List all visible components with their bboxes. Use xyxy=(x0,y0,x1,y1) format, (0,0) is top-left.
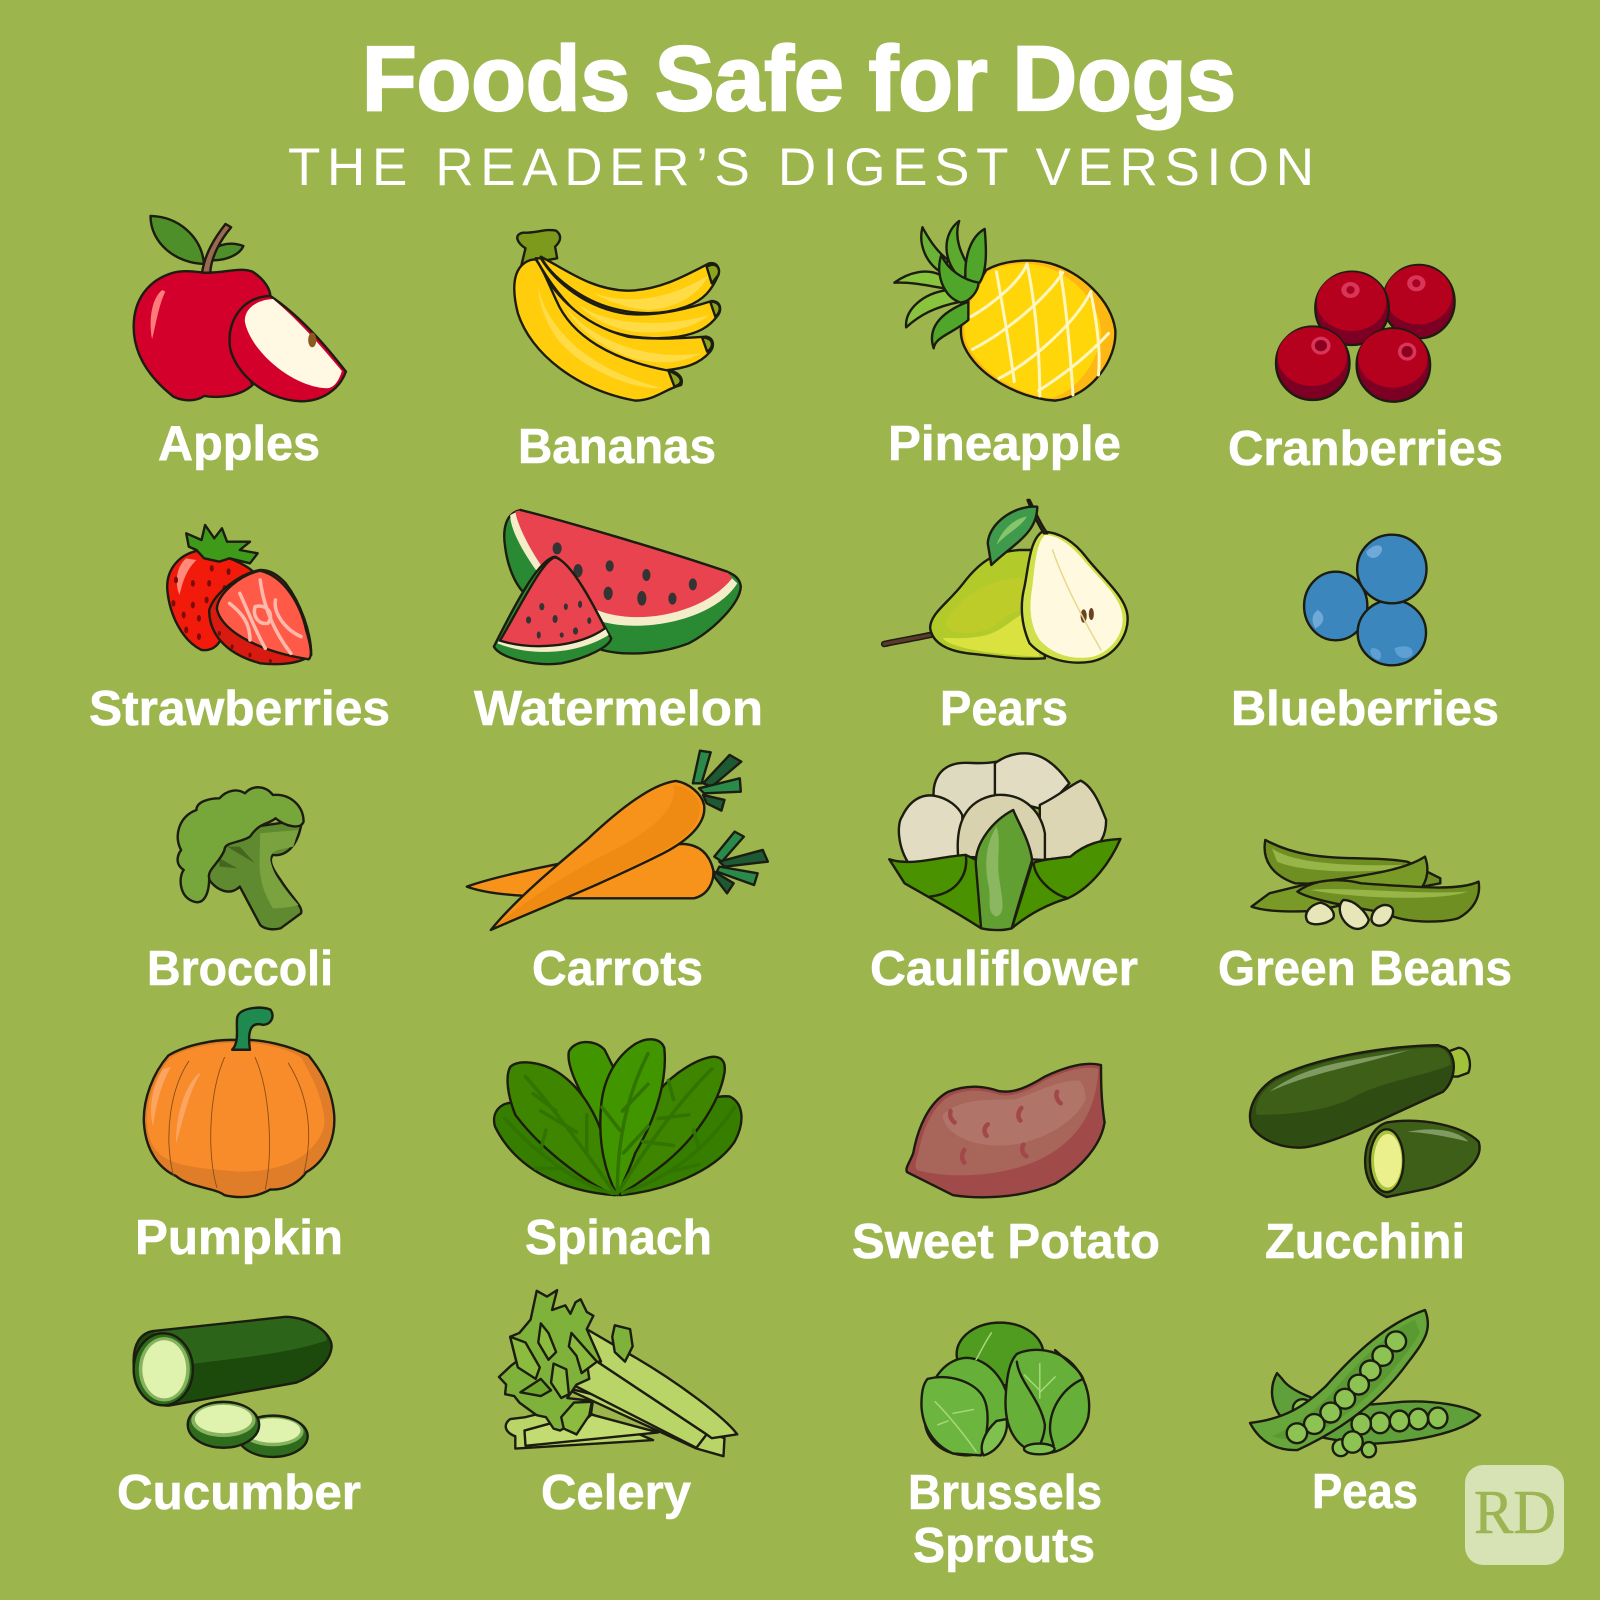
label: Pumpkin: Pumpkin xyxy=(135,1211,343,1265)
icon: pineapple xyxy=(894,221,1115,401)
label: Cucumber: Cucumber xyxy=(117,1466,361,1520)
label: Zucchini: Zucchini xyxy=(1265,1215,1465,1269)
label: Bananas: Bananas xyxy=(518,420,716,474)
label: Celery: Celery xyxy=(541,1466,691,1520)
icon: sweet potato xyxy=(906,1064,1105,1197)
icon: blueberries xyxy=(1304,535,1427,665)
icon: celery xyxy=(499,1290,737,1456)
label: Pears: Pears xyxy=(940,682,1068,736)
label: Peas: Peas xyxy=(1312,1465,1418,1519)
logo: RD badge xyxy=(1465,1465,1564,1565)
subtitle: THE READER’S DIGEST VERSION xyxy=(288,138,1314,197)
label: Carrots: Carrots xyxy=(532,942,703,996)
label: Brussels: Brussels xyxy=(908,1466,1102,1520)
title: Foods Safe for Dogs xyxy=(362,28,1236,130)
label: Strawberries: Strawberries xyxy=(89,682,390,736)
label: Blueberries: Blueberries xyxy=(1231,682,1499,736)
logo: RD badge: RD xyxy=(1474,1479,1556,1547)
icon: bananas xyxy=(514,230,720,401)
icon: spinach xyxy=(494,1039,741,1195)
label: Green Beans: Green Beans xyxy=(1218,942,1512,996)
icon: cranberries xyxy=(1276,265,1455,402)
icon: cucumber xyxy=(134,1317,332,1457)
icon: brussels sprouts xyxy=(921,1323,1089,1455)
label: Broccoli: Broccoli xyxy=(147,942,333,996)
label: Apples: Apples xyxy=(158,417,320,471)
icon: apple xyxy=(134,216,346,401)
icon: pumpkin xyxy=(144,1008,334,1197)
icon: broccoli xyxy=(178,787,304,929)
label: Spinach: Spinach xyxy=(525,1211,712,1265)
icon: carrots xyxy=(467,751,768,930)
icon: green beans xyxy=(1252,840,1479,929)
icon: strawberry xyxy=(167,525,311,664)
label: Watermelon: Watermelon xyxy=(474,682,763,736)
icon: cauliflower xyxy=(889,753,1120,930)
icon: zucchini xyxy=(1250,1045,1480,1197)
icon: peas xyxy=(1250,1310,1480,1457)
icon: watermelon xyxy=(494,510,741,664)
label: Sprouts: Sprouts xyxy=(913,1519,1095,1573)
label: Pineapple: Pineapple xyxy=(888,417,1121,471)
icon: pear xyxy=(884,500,1128,663)
label: Cauliflower: Cauliflower xyxy=(870,942,1138,996)
label: Cranberries: Cranberries xyxy=(1228,422,1503,476)
label: Sweet Potato: Sweet Potato xyxy=(852,1215,1160,1269)
